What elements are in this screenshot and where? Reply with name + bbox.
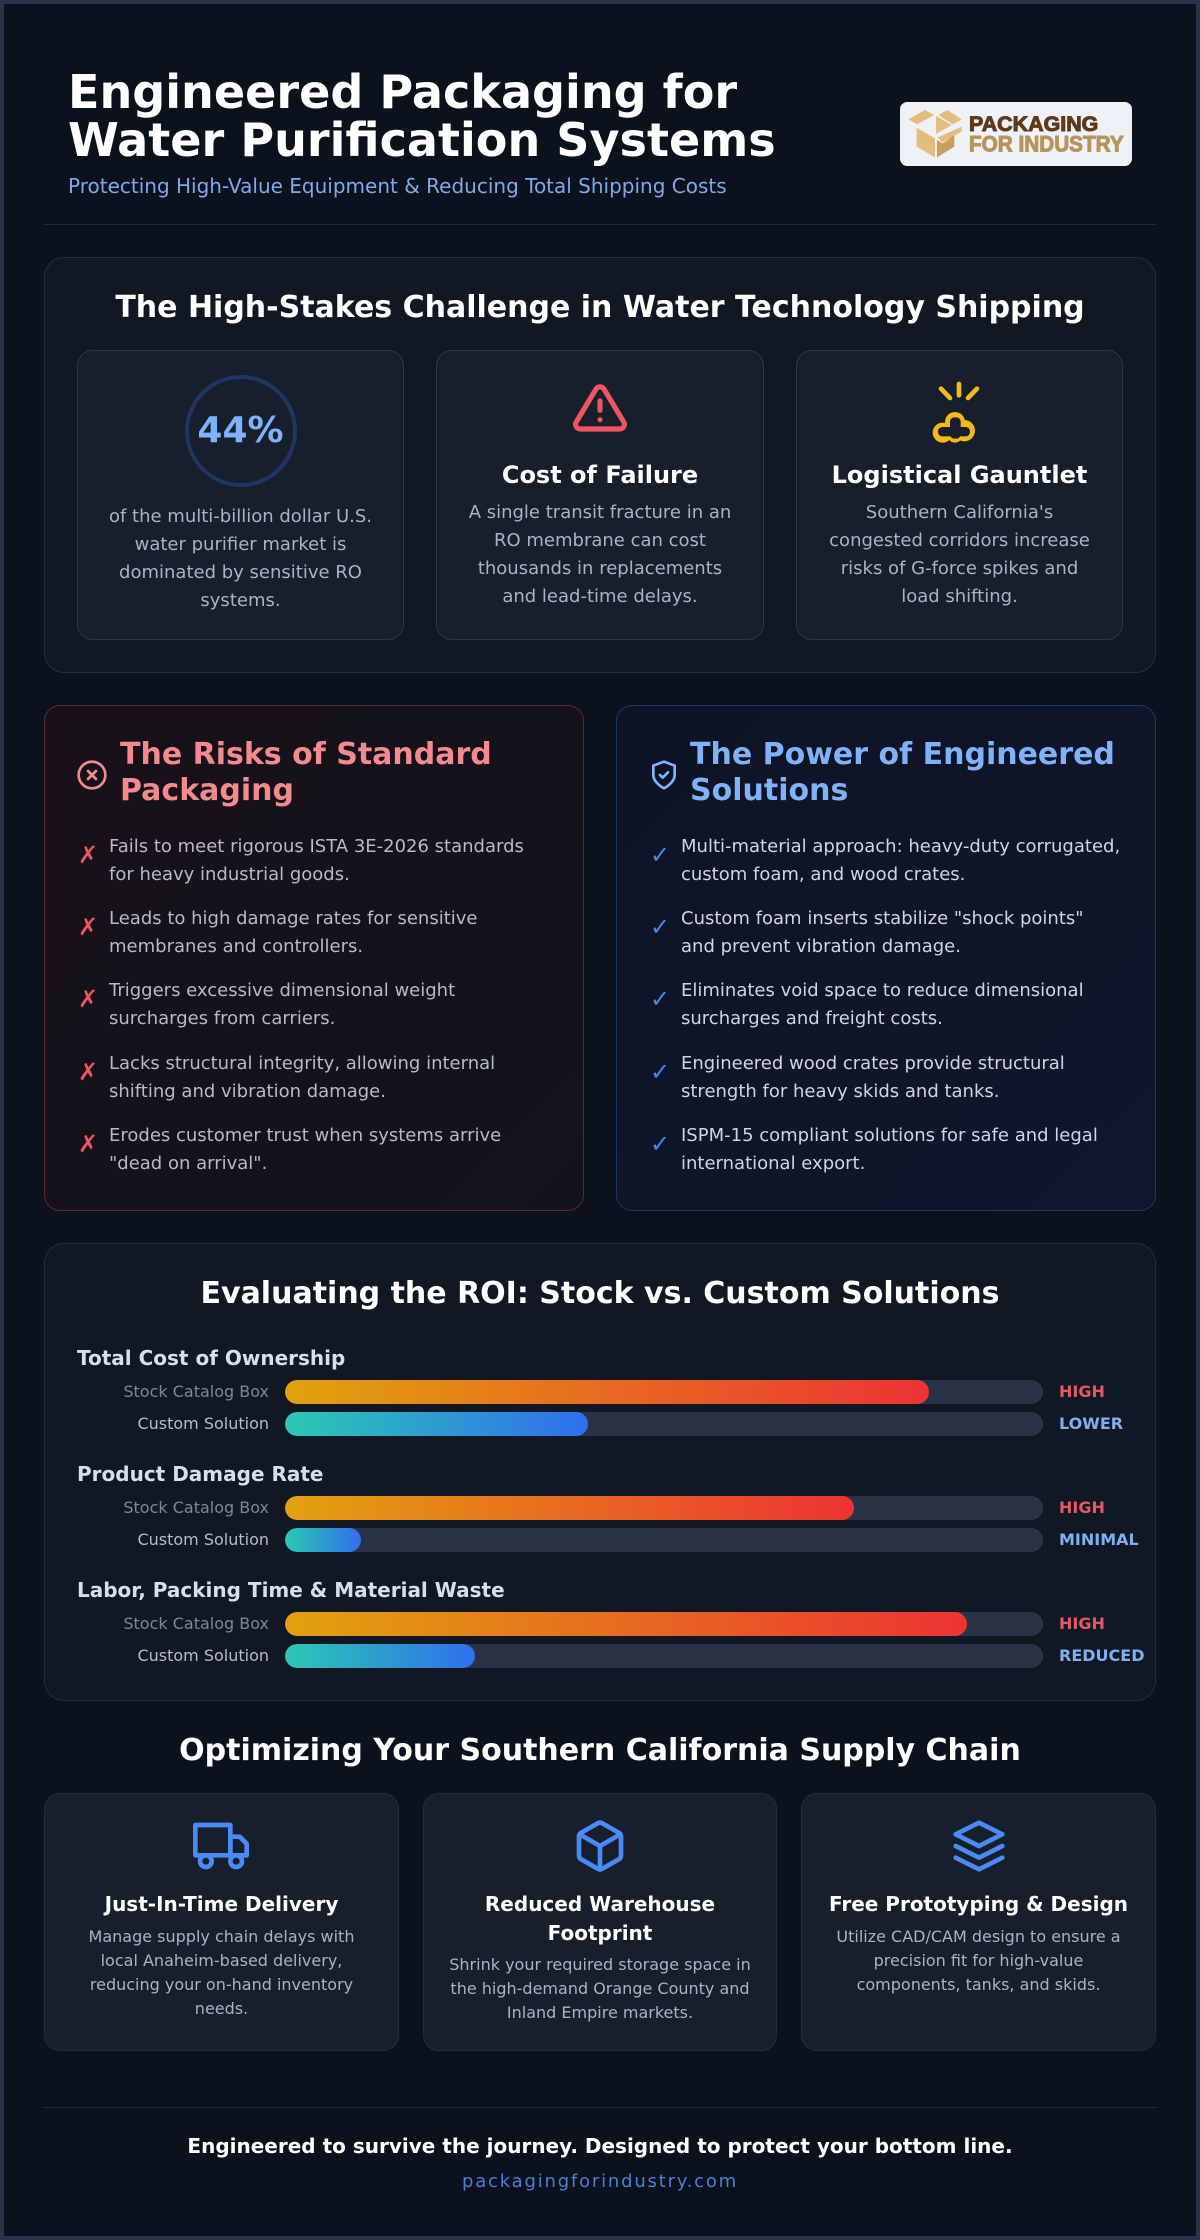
footer tagline: Engineered to survive the journey. Designed to protect your bottom line. [187,2134,1013,2158]
card text [469,502,731,607]
stock value: HIGH [1059,1614,1105,1633]
stat circle [185,375,297,487]
stat text: dominated by sensitive RO [119,562,362,583]
stock bar [285,1612,1043,1636]
logo [900,102,1132,166]
card: just-in-time delivery [44,1793,399,2051]
list item: ✗ [78,1130,98,1158]
card text: load shifting. [901,586,1018,607]
card text: precision fit for high-value [874,1951,1083,1970]
panel heading [120,737,492,808]
list item: Custom foam inserts stabilize "shock points" [681,908,1084,929]
card text: Manage supply chain delays with [89,1927,354,1946]
card text: A single transit fracture in an [469,502,731,523]
card: 44% stat [77,350,404,640]
stock bar [285,1380,1043,1404]
icon: warning triangle [573,384,627,432]
bar chart: product damage rate [77,1462,1139,1552]
stock value: HIGH [1059,1382,1105,1401]
card text: thousands in replacements [478,558,722,579]
card text [449,1955,751,2022]
list item: ✓ [650,841,670,869]
panel heading [690,737,1115,808]
list item: for heavy industrial goods. [109,864,350,885]
list item: shifting and vibration damage. [109,1081,386,1102]
list item: Erodes customer trust when systems arrive [109,1125,501,1146]
header divider [44,224,1156,225]
card heading: Reduced Warehouse [485,1892,715,1916]
bar chart: total cost of ownership [77,1346,1123,1436]
list item: ✗ [78,985,98,1013]
list item [650,1053,1065,1102]
list item: Eliminates void space to reduce dimensional [681,980,1084,1001]
list item: ✗ [78,841,98,869]
list item [650,1125,1098,1174]
card heading: Footprint [548,1921,652,1945]
stock label: Stock Catalog Box [123,1498,269,1517]
card text: the high-demand Orange County and [450,1979,750,1998]
card text: RO membrane can cost [494,530,706,551]
logo: FOR INDUSTRY [969,132,1124,157]
panel heading: Solutions [690,773,848,808]
card text: Southern California's [866,502,1053,523]
icon: shield check [652,760,676,790]
icon: truck [193,1822,249,1870]
heading: ROI: Evaluating the ROI: Stock vs. Custom Solutions [201,1276,999,1311]
list item: Engineered wood crates provide structural [681,1053,1065,1074]
list item: Triggers excessive dimensional weight [109,980,455,1001]
list item [78,1053,495,1102]
list item: ISPM-15 compliant solutions for safe and legal [681,1125,1098,1146]
list item: ✗ [78,913,98,941]
panel: ROI comparison [44,1243,1156,1701]
panel heading: Packaging [120,773,294,808]
heading: supply chain: Optimizing Your Southern California Supply Chain [179,1733,1021,1768]
custom bar [285,1644,1043,1668]
panel: risks of standard packaging [44,705,584,1211]
footer divider [44,2107,1156,2108]
list item [78,1125,501,1174]
list item [650,836,1120,885]
custom label: Custom Solution [137,1414,269,1433]
list item: ✓ [650,1130,670,1158]
panel heading: The Power of Engineered [690,737,1115,772]
panel: high-stakes challenge [44,257,1156,673]
heading: challenge: The High-Stakes Challenge in Water Technology Shipping [115,290,1085,325]
title: Engineered Packaging for [68,65,737,119]
list item: ✓ [650,1058,670,1086]
custom bar [285,1412,1043,1436]
card text: Shrink your required storage space in [449,1955,751,1974]
stat value: 44% [197,410,284,451]
card: reduced warehouse footprint [423,1793,777,2051]
panel heading: The Risks of Standard [120,737,492,772]
list item [78,908,478,957]
group title: Labor, Packing Time & Material Waste [77,1578,505,1602]
stat text: systems. [200,590,281,611]
card heading: Cost of Failure [502,461,698,489]
icon: box [576,1820,624,1872]
card text: components, tanks, and skids. [857,1975,1100,1994]
list item: membranes and controllers. [109,936,363,957]
custom label: Custom Solution [137,1646,269,1665]
list item [78,980,455,1029]
list item: and prevent vibration damage. [681,936,961,957]
list item [78,836,524,885]
list item: surcharges and freight costs. [681,1008,943,1029]
list item: Multi-material approach: heavy-duty corrugated, [681,836,1120,857]
list item: international export. [681,1153,865,1174]
group title: Product Damage Rate [77,1462,324,1486]
list item: Lacks structural integrity, allowing internal [109,1053,495,1074]
list item: ✓ [650,913,670,941]
title [68,65,776,167]
card text: and lead-time delays. [502,586,698,607]
card text [836,1927,1121,1994]
bar chart: labor, packing time and waste [77,1578,1144,1668]
stat text [109,506,372,611]
icon: layers [953,1820,1005,1872]
title: Water Purification Systems [68,113,776,167]
card: logistical gauntlet [796,350,1123,640]
custom bar [285,1528,1043,1552]
card text: needs. [195,1999,248,2018]
stock bar [285,1496,1043,1520]
card heading: Free Prototyping & Design [829,1892,1128,1916]
list item [650,980,1084,1029]
header [68,65,776,198]
card heading: Just-In-Time Delivery [105,1892,338,1916]
subtitle: Protecting High-Value Equipment & Reducing Total Shipping Costs [68,174,727,198]
stat text: of the multi-billion dollar U.S. [109,506,372,527]
list item: "dead on arrival". [109,1153,267,1174]
list item [650,908,1084,957]
custom value: MINIMAL [1059,1530,1139,1549]
card text: local Anaheim-based delivery, [101,1951,342,1970]
logo: PACKAGING [969,113,1098,136]
card heading [485,1892,715,1945]
group title: Total Cost of Ownership [77,1346,345,1370]
custom value: REDUCED [1059,1646,1144,1665]
stat text: water purifier market is [135,534,346,555]
list item: Fails to meet rigorous ISTA 3E-2026 standards [109,836,524,857]
icon: x circle [77,760,107,790]
footer url: packagingforindustry.com [462,2171,738,2192]
card text: congested corridors increase [829,530,1090,551]
card: free prototyping [801,1793,1156,2051]
card text: Utilize CAD/CAM design to ensure a [836,1927,1121,1946]
list item: surcharges from carriers. [109,1008,335,1029]
list item: custom foam, and wood crates. [681,864,965,885]
card heading: Logistical Gauntlet [832,461,1087,489]
card text: Inland Empire markets. [507,2003,693,2022]
list item: ✓ [650,985,670,1013]
card: cost of failure [436,350,764,640]
custom value: LOWER [1059,1414,1123,1433]
panel: power of engineered solutions [616,705,1156,1211]
list item: Leads to high damage rates for sensitive [109,908,478,929]
list item: strength for heavy skids and tanks. [681,1081,999,1102]
stock label: Stock Catalog Box [123,1382,269,1401]
stock value: HIGH [1059,1498,1105,1517]
card text [829,502,1090,607]
icon: spikes and cloud [932,382,980,443]
card text [89,1927,354,2018]
custom label: Custom Solution [137,1530,269,1549]
stock label: Stock Catalog Box [123,1614,269,1633]
list item: ✗ [78,1058,98,1086]
card text: risks of G-force spikes and [841,558,1078,579]
card text: reducing your on-hand inventory [90,1975,353,1994]
